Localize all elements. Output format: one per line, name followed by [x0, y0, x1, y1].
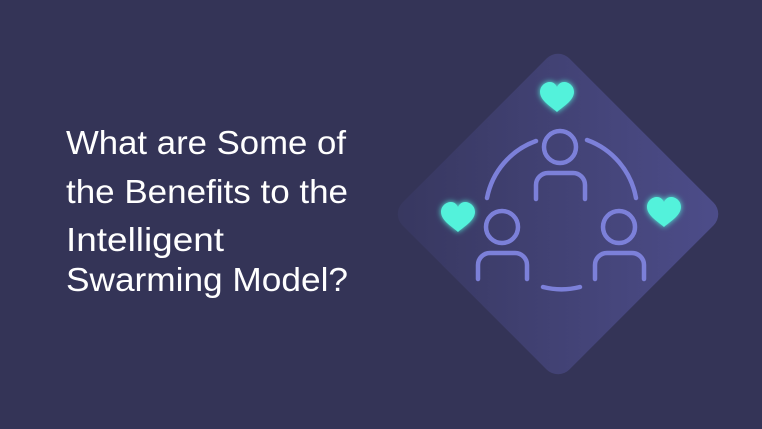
- person: top: [536, 131, 585, 199]
- title: [66, 124, 348, 298]
- person: right: [595, 211, 644, 279]
- title: the Benefits to the: [66, 173, 348, 210]
- arcs: [487, 140, 636, 289]
- title: What are Some of: [66, 124, 347, 161]
- person: left: [478, 211, 527, 279]
- icon: hearts: [441, 82, 681, 232]
- diamond panel: [391, 47, 725, 381]
- title: Swarming Model?: [66, 261, 348, 298]
- icon: swarm circle of people: [478, 131, 644, 289]
- title: Intelligent: [66, 221, 224, 258]
